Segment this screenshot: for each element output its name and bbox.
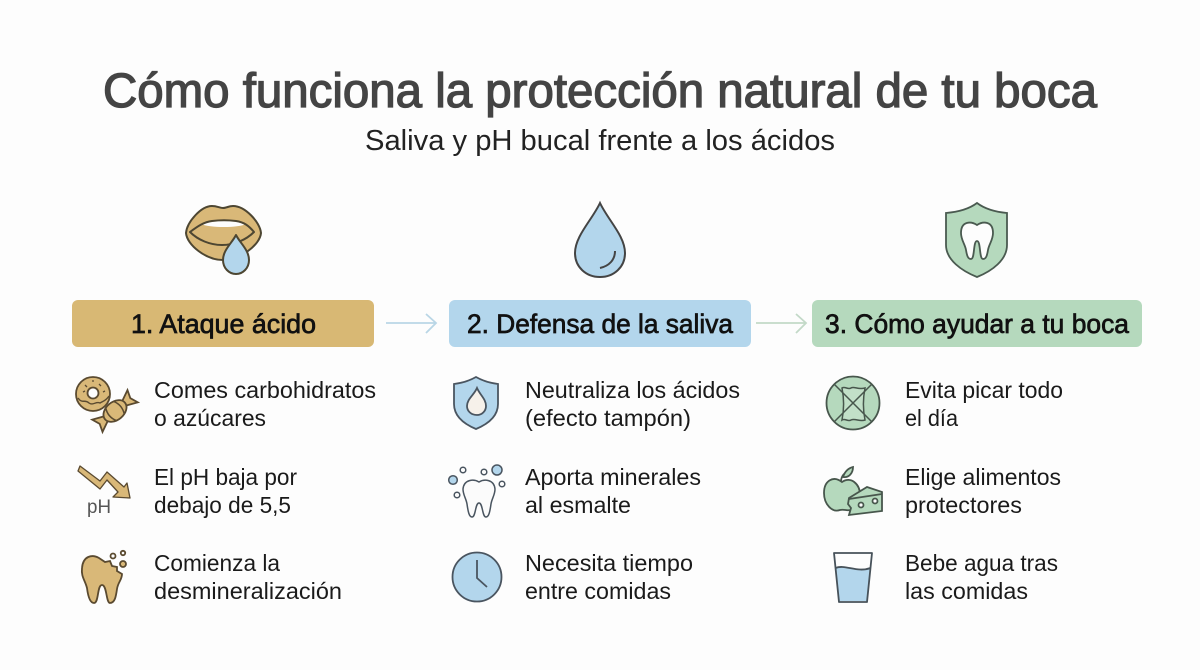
text: picar: Evita picar todo (905, 377, 1063, 403)
header: 1. Ataque ácido (72, 300, 374, 347)
title: Cómo funciona la protección natural de tu boca (103, 65, 1097, 118)
header: 2. Defensa de la saliva: 2. Defensa de la saliva (467, 309, 734, 339)
text: desmineralización: Comienza la (154, 550, 281, 576)
text: neutraliza (525, 377, 740, 431)
text: agua (905, 550, 1058, 604)
icon: shield with drop (454, 377, 498, 429)
text: neutraliza: Neutraliza los ácidos (525, 377, 740, 403)
icon: apple and cheese (824, 467, 882, 515)
arrow: step 2 to 3 (756, 314, 806, 333)
icon: clock (452, 552, 502, 602)
icon: shield with tooth (946, 203, 1007, 277)
text: tiempo (525, 550, 693, 604)
text: pH baja: El pH baja por (154, 464, 297, 490)
header: 3. Cómo ayudar a tu boca: 3. Cómo ayudar a tu boca (825, 309, 1130, 339)
subtitle: Saliva y pH bucal frente a los ácidos (365, 125, 835, 157)
text: picar: el día (905, 405, 959, 431)
text: desmineralización: desmineralización (154, 578, 342, 604)
text: agua: Bebe agua tras (905, 550, 1058, 576)
text: alimentos: Elige alimentos (905, 464, 1061, 490)
icon: glass of water (834, 553, 872, 602)
panel: ataque ácido (72, 206, 376, 604)
panel: cómo ayudar (812, 203, 1142, 604)
text: tiempo: Necesita tiempo (525, 550, 693, 576)
header: 3. Cómo ayudar a tu boca (812, 300, 1142, 347)
header: 1. Ataque ácido: 1. Ataque ácido (131, 309, 316, 339)
panel: defensa de la saliva (449, 203, 751, 604)
text: alimentos (905, 464, 1061, 518)
icon: no snacking (826, 376, 880, 430)
text: agua: las comidas (905, 578, 1028, 604)
icon: damaged tooth (82, 551, 126, 603)
text: carbohidratos (154, 377, 376, 431)
text: minerales (525, 464, 701, 518)
text: desmineralización (154, 550, 342, 604)
text: tiempo: entre comidas (525, 578, 671, 604)
text: alimentos: protectores (905, 492, 1022, 518)
icon: pH falling: pH (87, 497, 111, 518)
text: neutraliza: (efecto tampón) (525, 405, 691, 431)
text: pH baja: debajo de 5,5 (154, 492, 291, 518)
text: picar (905, 377, 1063, 431)
icon: saliva drop (575, 203, 625, 277)
text: carbohidratos: o azúcares (154, 405, 266, 431)
icon: donut and candy (76, 377, 138, 433)
icon: tooth with minerals (449, 465, 505, 517)
text: carbohidratos: Comes carbohidratos (154, 377, 376, 403)
header: 2. Defensa de la saliva (449, 300, 751, 347)
icon: pH falling (78, 466, 130, 518)
text: minerales: al esmalte (525, 492, 631, 518)
arrow: step 1 to 2 (386, 314, 436, 333)
text: pH baja (154, 464, 297, 518)
text: minerales: Aporta minerales (525, 464, 701, 490)
icon: lips with drop (186, 206, 261, 274)
